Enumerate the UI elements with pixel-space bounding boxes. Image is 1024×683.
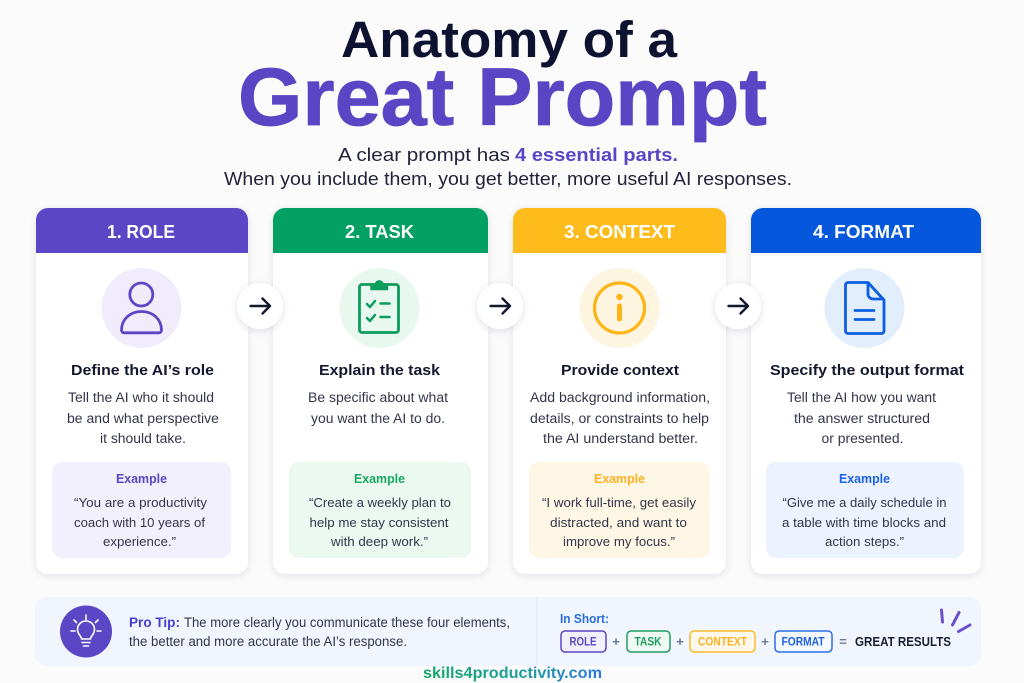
icon: document bbox=[824, 268, 904, 348]
operators: = bbox=[839, 634, 847, 649]
subtitle: A clear prompt has bbox=[338, 144, 510, 165]
operators: + bbox=[761, 634, 769, 649]
pill: context bbox=[690, 631, 755, 652]
text: role description: Tell the AI who it should bbox=[68, 390, 214, 405]
pill: context: CONTEXT bbox=[698, 636, 747, 648]
header: context bbox=[513, 208, 726, 253]
example: format: a table with time blocks and bbox=[782, 515, 946, 530]
arrow: role to task bbox=[237, 283, 283, 329]
operators: + bbox=[612, 634, 620, 649]
icon: info bbox=[580, 268, 660, 348]
pill: task: TASK bbox=[634, 636, 662, 648]
example: role: “You are a productivity bbox=[74, 495, 208, 510]
text: format description: Tell the AI how you want bbox=[787, 390, 936, 405]
example: context: distracted, and want to bbox=[550, 515, 687, 530]
header: role bbox=[36, 208, 248, 253]
heading: context: Provide context bbox=[561, 362, 679, 379]
pill: role: ROLE bbox=[570, 636, 597, 648]
subtitle bbox=[224, 144, 792, 189]
example: format: “Give me a daily schedule in bbox=[782, 495, 946, 510]
pill: format: FORMAT bbox=[782, 636, 824, 648]
text: format description: the answer structured bbox=[794, 411, 930, 426]
arrow: context to format bbox=[715, 283, 761, 329]
icon: clipboard bbox=[340, 268, 420, 348]
pill: task bbox=[627, 631, 670, 652]
text: format description: or presented. bbox=[822, 431, 904, 446]
header: role: 1. ROLE bbox=[107, 222, 175, 242]
text: context description bbox=[530, 390, 710, 446]
example: task: help me stay consistent bbox=[310, 515, 449, 530]
text: task description: Be specific about what bbox=[308, 390, 448, 405]
heading: role: Define the AI’s role bbox=[71, 362, 214, 379]
example: context: improve my focus.” bbox=[563, 534, 675, 549]
footer: website: skills4productivity.com bbox=[423, 665, 602, 682]
panel: task bbox=[273, 208, 488, 574]
header: format bbox=[751, 208, 981, 253]
text: task description bbox=[308, 390, 448, 426]
pill: format bbox=[775, 631, 832, 652]
example: task: with deep work.” bbox=[330, 534, 428, 549]
label: in short: In Short: bbox=[560, 612, 609, 626]
example: context bbox=[529, 462, 710, 558]
text: pro tip: The more clearly you communicate these four elements, bbox=[184, 615, 510, 630]
example: context: Example bbox=[594, 472, 645, 486]
example: role: experience.” bbox=[103, 534, 176, 549]
arrow: task to context bbox=[477, 283, 523, 329]
text: context description: Add background information, bbox=[530, 390, 710, 405]
text: role description bbox=[67, 390, 219, 446]
example: format: action steps.” bbox=[825, 534, 904, 549]
panel: role bbox=[36, 208, 248, 574]
text: great results: GREAT RESULTS bbox=[855, 634, 951, 649]
example: context: “I work full-time, get easily bbox=[542, 495, 697, 510]
text: pro tip: Pro Tip: bbox=[129, 615, 180, 630]
text: context description: the AI understand better. bbox=[543, 431, 698, 446]
example: role bbox=[52, 462, 231, 558]
header: task: 2. TASK bbox=[345, 222, 414, 242]
heading: task: Explain the task bbox=[319, 362, 441, 379]
heading: format: Specify the output format bbox=[770, 362, 964, 379]
header: context: 3. CONTEXT bbox=[564, 222, 675, 242]
title: Anatomy of a bbox=[341, 11, 678, 68]
panel: context bbox=[513, 208, 726, 574]
panel: in short bbox=[560, 610, 970, 652]
example: task bbox=[289, 462, 471, 558]
panel: format bbox=[751, 208, 981, 574]
panel: pro tip bbox=[35, 597, 981, 666]
example: format: Example bbox=[839, 472, 890, 486]
pill: role bbox=[561, 631, 606, 652]
example: task: “Create a weekly plan to bbox=[309, 495, 451, 510]
text: task description: you want the AI to do. bbox=[311, 411, 445, 426]
example: task: Example bbox=[354, 472, 405, 486]
text: pro tip bbox=[129, 615, 510, 649]
example: role: Example bbox=[116, 472, 167, 486]
icon: light bulb bbox=[60, 606, 112, 658]
text: context description: details, or constraints to help bbox=[530, 411, 709, 426]
text: format description bbox=[787, 390, 936, 446]
title: Great Prompt bbox=[238, 52, 767, 143]
example: role: coach with 10 years of bbox=[74, 515, 205, 530]
icon: person bbox=[102, 268, 182, 348]
icon: sparkle lines bbox=[942, 610, 970, 632]
text: role description: be and what perspective bbox=[67, 411, 219, 426]
operators bbox=[612, 634, 847, 649]
subtitle: When you include them, you get better, more useful AI responses. bbox=[224, 168, 792, 189]
header: format: 4. FORMAT bbox=[813, 222, 914, 242]
text: role description: it should take. bbox=[100, 431, 186, 446]
header: task bbox=[273, 208, 488, 253]
subtitle: 4 essential parts. bbox=[515, 144, 678, 165]
title bbox=[238, 11, 767, 143]
example: format bbox=[766, 462, 964, 558]
operators: + bbox=[676, 634, 684, 649]
text: pro tip: the better and more accurate the AI’s response. bbox=[129, 634, 407, 649]
